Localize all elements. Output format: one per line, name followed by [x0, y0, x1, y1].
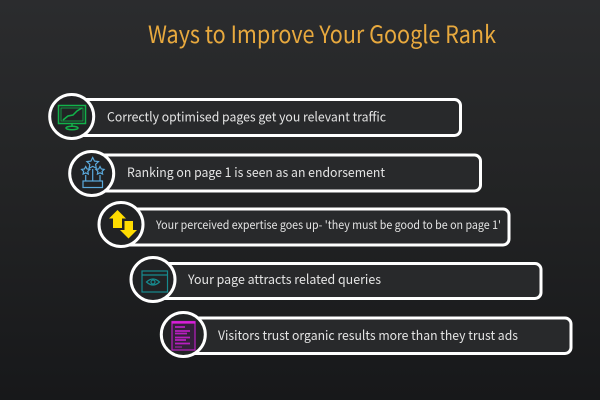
icon: monitor with chart [58, 106, 86, 130]
bar 2 [94, 155, 480, 191]
item 4: related queries [131, 258, 541, 302]
text 3: Your perceived expertise goes up- 'they must be good to be on page 1' [155, 217, 501, 233]
circle 1 [50, 94, 94, 138]
icon: podium with stars [82, 158, 104, 188]
bar 5 [184, 318, 571, 354]
bar 3 [122, 209, 509, 245]
item 5: organic results [161, 312, 571, 356]
circle 4 [131, 258, 175, 302]
bar 4 [154, 264, 541, 298]
item 3: perceived expertise [99, 202, 509, 246]
text 5: Visitors trust organic results more than they trust ads [218, 325, 518, 344]
text 1: Correctly optimised pages get you relevant traffic [107, 106, 386, 126]
text 2: Ranking on page 1 is seen as an endorsement [127, 162, 385, 181]
icon: up and down arrows [109, 210, 137, 238]
item 2: endorsement [70, 152, 480, 196]
title: Ways to Improve Your Google Rank [148, 15, 496, 50]
circle 3 [99, 202, 143, 246]
circle 2 [70, 152, 114, 196]
circle 5 [161, 312, 205, 356]
item 1: relevant traffic [50, 94, 460, 138]
text 4: Your page attracts related queries [187, 269, 381, 288]
icon: document [172, 322, 196, 350]
bar 1 [72, 100, 460, 136]
icon: browser window with eye [142, 271, 168, 292]
